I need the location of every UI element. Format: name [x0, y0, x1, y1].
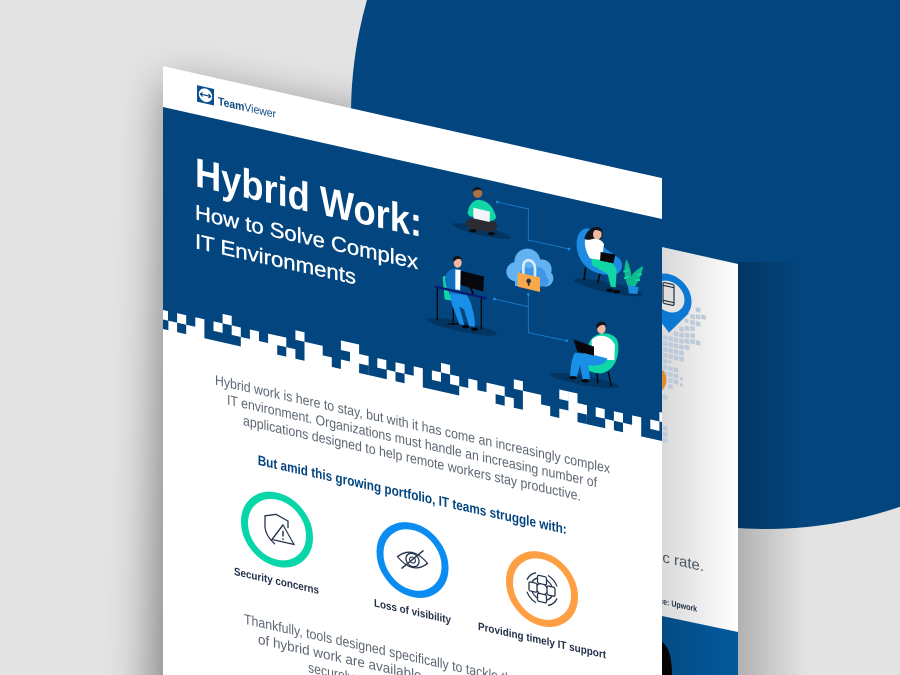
icon: cloud with padlock — [506, 249, 553, 292]
panel: front page — [163, 66, 662, 675]
subtitle: IT Environments — [195, 229, 356, 289]
back page text: economic rate. — [606, 537, 704, 575]
orange marker — [644, 367, 666, 393]
icon: TeamViewer logo — [197, 85, 214, 105]
orange ring with lifebuoy icon — [510, 548, 574, 630]
dotted map — [663, 300, 706, 452]
back page shadow — [738, 262, 806, 675]
person: woman in blue chair — [573, 227, 644, 300]
blue ring with eye icon — [380, 519, 445, 601]
person: man at desk with monitor — [425, 256, 498, 339]
header navy band with stepped edge — [163, 107, 662, 441]
section heading: But amid this growing portfolio, IT teams struggle with: — [258, 453, 567, 538]
green ring with shield icon — [244, 489, 310, 570]
back page blue footer band — [662, 616, 738, 675]
panel: back page — [606, 247, 738, 675]
intro text: IT environment. Organizations must handle an increasing number of — [227, 393, 597, 491]
intro text: applications designed to help remote workers stay productive. — [243, 413, 581, 505]
header logo — [197, 85, 276, 121]
icon: phone — [663, 282, 674, 306]
item: loss of visibility — [374, 518, 452, 627]
logo wordmark: TeamViewer — [218, 95, 276, 121]
person: man with laptop in green chair — [550, 322, 620, 391]
front page cast shadow — [150, 82, 662, 675]
back page source: Source: Upwork — [643, 592, 697, 614]
label: Security concerns — [234, 566, 319, 597]
title: Hybrid Work: — [195, 149, 422, 246]
connector lines — [493, 201, 570, 342]
item: security concerns — [234, 486, 319, 597]
label: Providing timely IT support — [478, 621, 606, 661]
hero illustration — [425, 187, 644, 391]
back page footer dark shape — [662, 642, 672, 675]
icon: potted plant — [623, 259, 643, 294]
intro text: Hybrid work is here to stay, but with it has come an increasingly complex — [215, 373, 610, 477]
subtitle: How to Solve Complex — [195, 200, 418, 274]
item: providing timely IT support — [478, 551, 606, 658]
person: top with laptop — [451, 187, 512, 242]
large navy circle — [351, 0, 900, 529]
location pin — [647, 273, 689, 337]
label: Loss of visibility — [374, 597, 452, 627]
closing text — [244, 614, 507, 675]
